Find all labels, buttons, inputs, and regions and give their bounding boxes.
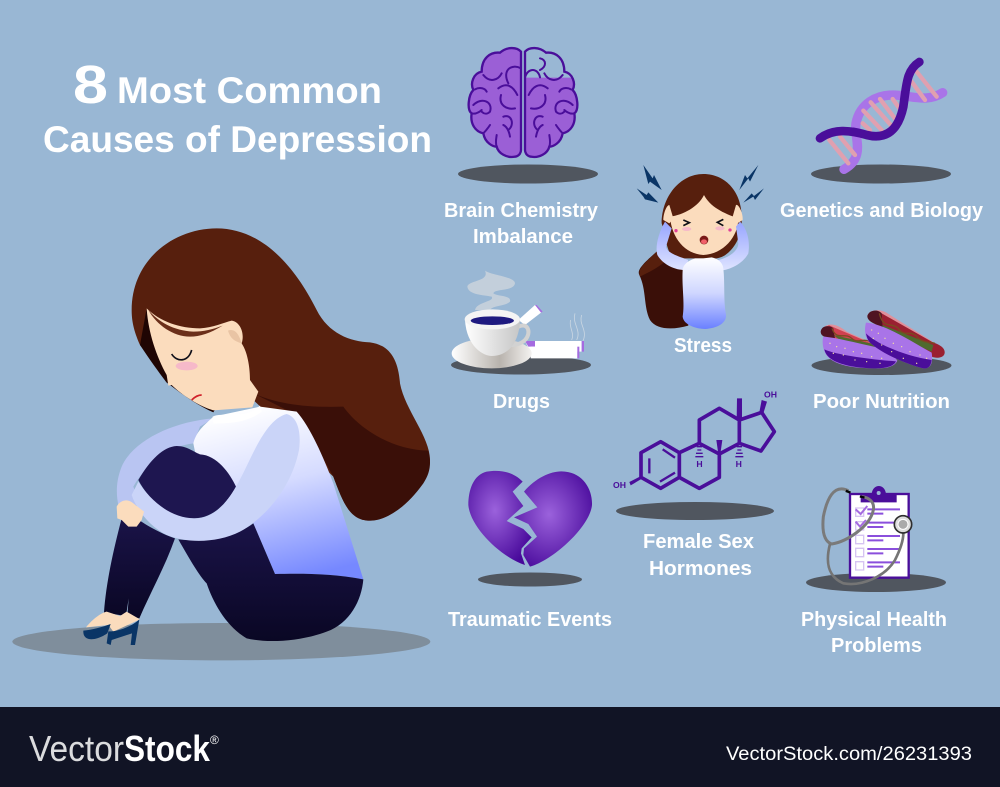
hair shadow [253,393,430,521]
icon: DNA helix [820,62,943,169]
trousers hip [178,523,363,641]
label: Stress: Stress [674,335,732,357]
knee [138,446,236,518]
icon: estradiol molecule: OH [764,390,777,400]
head hair [662,174,742,258]
label: Drugs: Drugs [493,391,550,413]
clip [861,486,897,502]
stethoscope [823,489,874,544]
illustration: sad woman sitting [12,228,430,660]
coffee [471,316,514,325]
figure shadow [12,623,430,660]
shadow: clipboard [806,573,946,592]
shadow: DNA [811,164,951,184]
label: Brain Chemistry Imbalance: Brain Chemistry [444,200,599,222]
left hot dog [822,325,877,345]
mouth [192,395,202,400]
back hair [639,252,688,328]
shadow: nutrition [812,356,952,375]
blush [176,362,198,370]
label: Female Sex Hormones: Hormones [649,558,752,580]
ear [228,330,242,343]
shadow: hormones [616,502,774,520]
eyes [683,219,723,226]
shadow: drugs [451,356,591,374]
icon: stressed girl [637,165,764,329]
raised cigarette [518,305,542,325]
right hot dog [868,310,937,345]
icon: estradiol molecule [613,390,777,490]
label: Physical Health Problems: Problems [831,635,922,657]
stress bolts [637,165,764,203]
fringe [148,310,223,337]
dark hair beside face [140,308,217,412]
icon: brain [469,48,577,157]
title: 8 [73,55,108,115]
footer logo: ® [210,733,219,747]
face [147,308,258,410]
hand [117,500,144,527]
cigarette smoke [570,313,584,342]
shoes [83,619,139,645]
label: Traumatic Events: Traumatic Events [448,609,612,631]
icon: clipboard and stethoscope [823,486,912,584]
saucer [452,338,532,368]
icon: hot dogs [821,310,945,368]
title [43,55,432,160]
footer logo: Stock [124,728,211,769]
footer image id: VectorStock.com/26231393 [726,744,972,765]
body [682,257,726,329]
icon: estradiol molecule: H [736,459,742,469]
face [670,195,738,255]
footer logo [29,728,219,769]
front arm [132,414,300,541]
label: Brain Chemistry Imbalance [444,200,599,248]
cup [465,320,520,356]
icon: broken heart [468,471,592,567]
label: Physical Health Problems: Physical Health [801,609,947,631]
mouth [700,236,708,244]
shirt [193,407,363,579]
label: Female Sex Hormones [643,531,754,580]
label: Physical Health Problems [801,609,947,657]
board [850,494,909,578]
title: Most Common [117,70,382,111]
blush [682,226,725,231]
footer logo: Vector [29,728,124,769]
collar [213,406,262,423]
checklist [856,508,864,570]
icon: estradiol molecule: OH [613,480,626,490]
back arm [117,418,213,505]
cigarettes [525,341,582,352]
icon: estradiol molecule: H [696,459,703,469]
arms [657,222,749,271]
lower legs [104,518,175,618]
shadow: heart [478,572,582,586]
label: Female Sex Hormones: Female Sex [643,531,754,553]
icon: coffee and cigarettes [452,271,584,368]
label: Genetics and Biology: Genetics and Biology [780,200,984,222]
label: Brain Chemistry Imbalance: Imbalance [473,226,573,248]
feet [86,612,140,632]
title: Causes of Depression [43,119,432,160]
label: Poor Nutrition: Poor Nutrition [813,391,950,413]
long hair [132,228,430,521]
closed eye [172,350,192,360]
earrings [674,228,732,232]
steam [467,271,515,310]
hands [663,205,743,223]
sprinkles [830,330,927,363]
shadow: brain [458,164,598,184]
cup handle [508,325,528,345]
footer bar [0,707,1000,787]
